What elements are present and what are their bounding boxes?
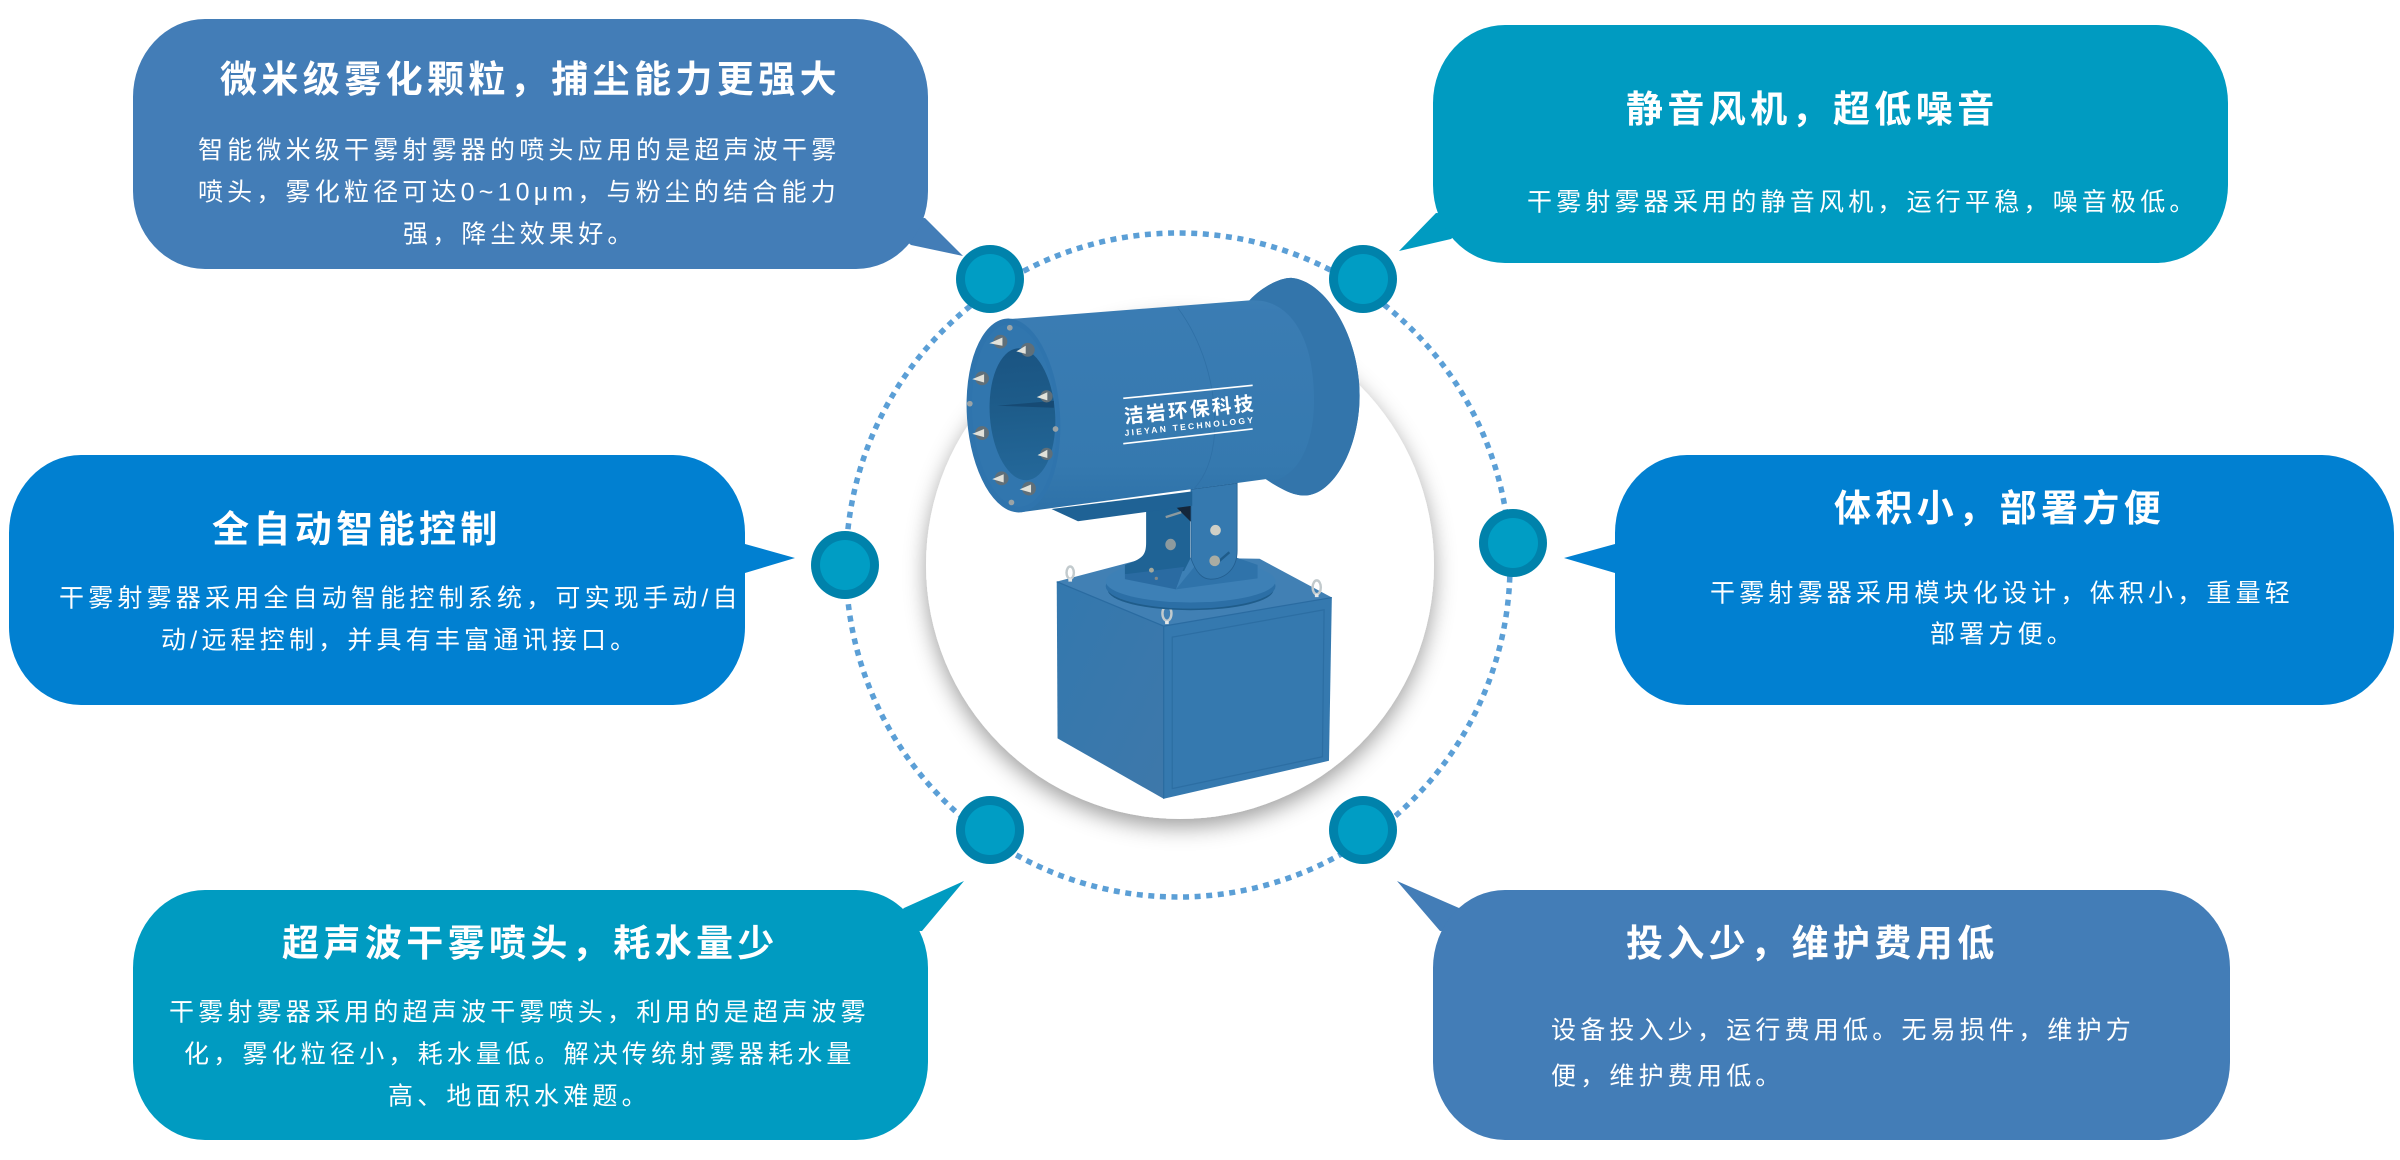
body text: 干雾射雾器采用模块化设计，体积小，重量轻: [1710, 580, 2294, 608]
cannon barrel and flare: [1009, 278, 1360, 512]
body text: 干雾射雾器采用全自动智能控制系统，可实现手动/自: [59, 584, 742, 612]
body text: 动/远程控制，并具有丰富通讯接口。: [161, 626, 639, 654]
heading: 超声波干雾喷头，耗水量少: [282, 923, 779, 964]
front bracket: [1176, 483, 1258, 589]
base box: [1057, 557, 1332, 799]
eye bolts: [1067, 567, 1321, 624]
turntable disc: [1106, 560, 1276, 610]
heading: 全自动智能控制: [212, 509, 502, 550]
nozzle bolts: [967, 325, 1058, 505]
rear bracket: [1125, 493, 1192, 589]
body text: 喷头，雾化粒径可达0~10μm，与粉尘的结合能力: [198, 178, 840, 206]
body text: 干雾射雾器采用的静音风机，运行平稳，噪音极低。: [1527, 188, 2199, 216]
logo on barrel: JIEYAN TECHNOLOGY: [1124, 415, 1254, 438]
body text: 智能微米级干雾射雾器的喷头应用的是超声波干雾: [198, 136, 840, 164]
node: top left: [956, 245, 1024, 313]
body text: [1710, 580, 2294, 648]
body text: 设备投入少，运行费用低。无易损件，维护方: [1551, 1016, 2135, 1044]
node: bottom right: [1329, 796, 1397, 864]
panel: automatic control: [9, 455, 795, 705]
panel: silent fan: [1399, 25, 2228, 263]
body text: 高、地面积水难题。: [388, 1082, 651, 1110]
body text: 部署方便。: [1930, 620, 2076, 648]
node: right: [1479, 509, 1547, 577]
node: left: [811, 531, 879, 599]
heading: 体积小，部署方便: [1834, 488, 2165, 529]
under-body bracket: [1051, 491, 1192, 521]
logo on barrel: [1123, 385, 1257, 444]
nozzle opening: [985, 346, 1060, 483]
dotted ring: [846, 233, 1510, 897]
body text: [169, 998, 870, 1110]
panel: ultrasonic nozzle: [133, 881, 964, 1140]
heading: 静音风机，超低噪音: [1626, 89, 1999, 130]
heading: 微米级雾化颗粒，捕尘能力更强大: [220, 59, 841, 100]
node: top right: [1329, 245, 1397, 313]
illustration: dry fog cannon: [960, 278, 1360, 799]
node: bottom left: [956, 796, 1024, 864]
panel: micron atomisation: [133, 19, 963, 269]
white centre disc: [926, 311, 1434, 819]
body text: [1551, 1016, 2135, 1090]
logo on barrel: 洁岩环保科技: [1123, 393, 1257, 428]
body text: 化，雾化粒径小，耗水量低。解决传统射雾器耗水量: [184, 1040, 856, 1068]
body text: [198, 136, 840, 248]
body text: 强，降尘效果好。: [403, 220, 637, 248]
body text: [59, 584, 742, 654]
heading: 投入少，维护费用低: [1626, 923, 1999, 964]
front flange: [960, 315, 1067, 516]
panel: small volume: [1564, 455, 2394, 705]
body text: 便，维护费用低。: [1551, 1062, 1785, 1090]
body text: 干雾射雾器采用的超声波干雾喷头，利用的是超声波雾: [169, 998, 870, 1026]
panel: low cost: [1397, 881, 2230, 1140]
